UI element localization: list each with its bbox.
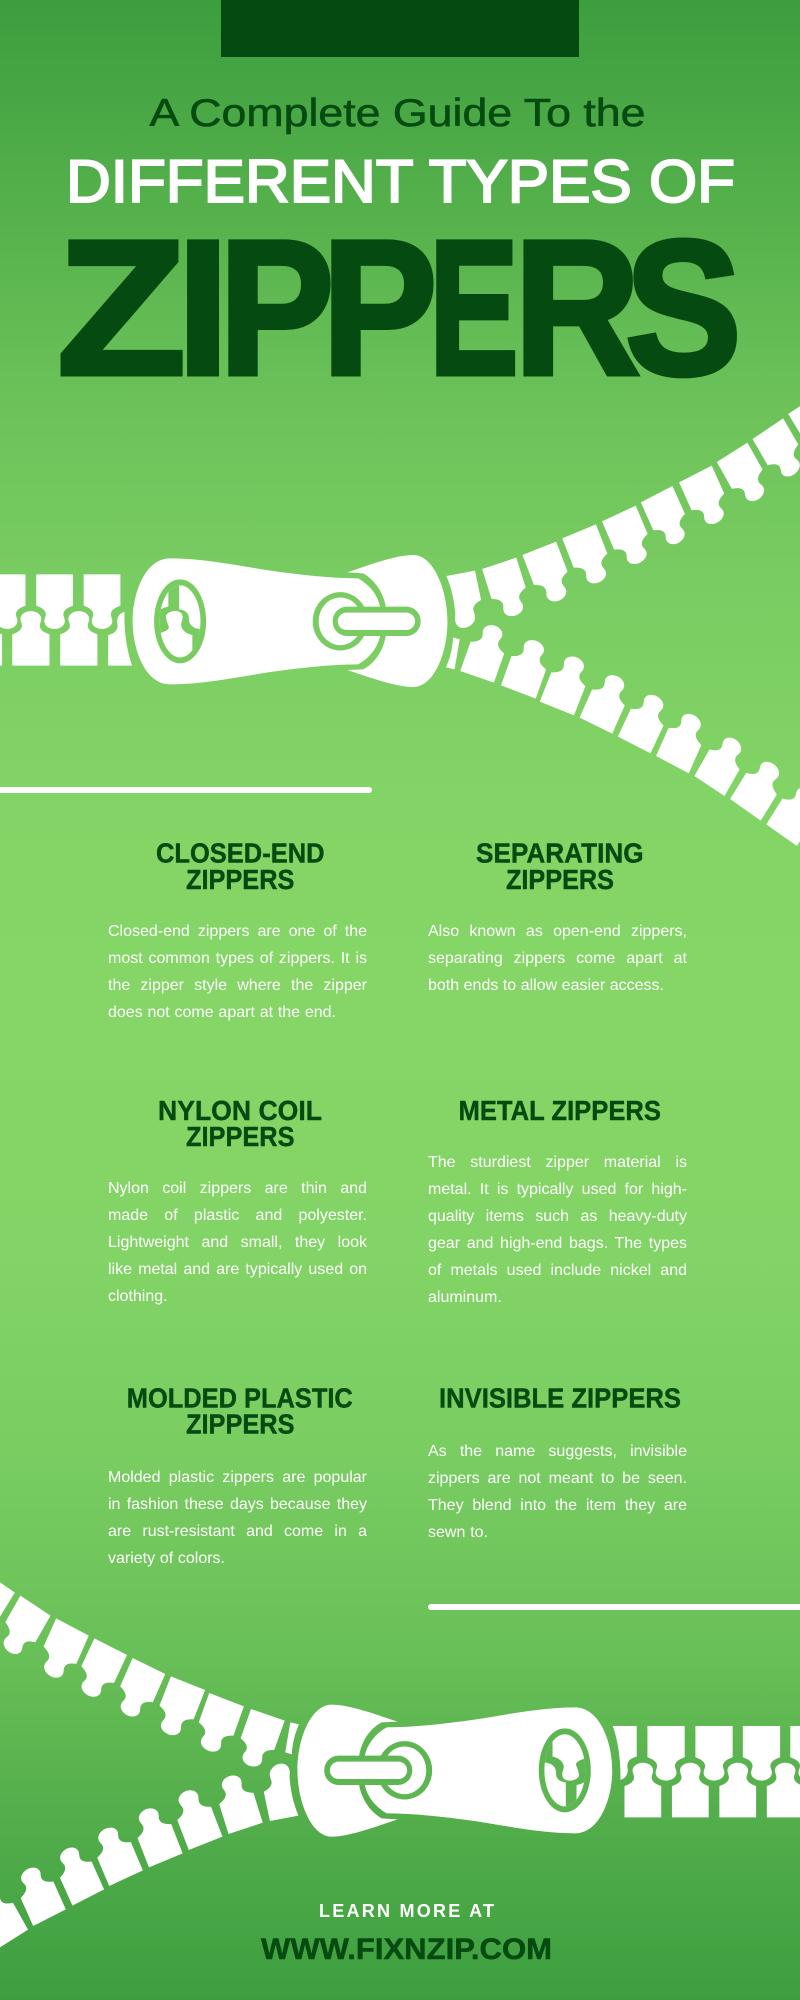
text: nylon coil description: made of plastic and polyester. — [108, 1207, 367, 1224]
panel: closed-end zippers — [108, 838, 367, 1021]
text: metal description: aluminum. — [428, 1289, 502, 1306]
text: closed-end description: does not come apart at the end. — [108, 1004, 336, 1021]
text: metal description: gear and high-end bags. The types — [428, 1235, 687, 1252]
text: nylon coil description: Nylon coil zippers are thin and — [108, 1180, 367, 1197]
text: nylon coil description: Lightweight and small, they look — [108, 1234, 367, 1251]
heading: nylon coil zippers: NYLON COIL — [158, 1095, 322, 1126]
heading: molded plastic zippers: ZIPPERS — [186, 1409, 294, 1440]
text: metal description: The sturdiest zipper material is — [428, 1154, 687, 1171]
upper strand of teeth, bottom zipper — [0, 1546, 299, 1772]
text: invisible description: As the name suggests, invisible — [428, 1443, 687, 1460]
text: invisible description: zippers are not meant to be seen. — [428, 1470, 687, 1487]
heading: closed-end zippers — [156, 838, 324, 895]
text: nylon coil description: clothing. — [108, 1288, 168, 1305]
white divider line right — [428, 1604, 800, 1610]
heading: separating zippers: SEPARATING — [476, 838, 644, 869]
heading: metal zippers: METAL ZIPPERS — [458, 1095, 661, 1126]
heading: molded plastic zippers — [127, 1383, 353, 1440]
text: invisible description — [428, 1443, 687, 1541]
heading: molded plastic zippers: MOLDED PLASTIC — [127, 1383, 353, 1414]
panel: invisible zippers — [428, 1383, 687, 1541]
slider, bottom zipper — [297, 1705, 612, 1837]
panel: metal zippers — [428, 1095, 687, 1306]
text: separating description — [428, 923, 687, 994]
heading: separating zippers: ZIPPERS — [506, 864, 614, 895]
text: invisible description: sewn to. — [428, 1524, 488, 1541]
slider, top zipper — [133, 555, 447, 687]
lower strand of teeth, bottom zipper — [0, 1764, 298, 1998]
text: molded plastic description: Molded plastic zippers are popular — [108, 1469, 367, 1486]
text: metal description: quality items such as heavy-duty — [428, 1208, 687, 1225]
footer: learn more at: LEARN MORE AT — [319, 1901, 494, 1921]
panel: nylon coil zippers — [108, 1095, 367, 1305]
text: metal description: metal. It is typically used for high- — [428, 1181, 687, 1198]
bottom zipper — [0, 1582, 800, 1948]
panel: molded plastic zippers — [108, 1383, 368, 1567]
top zipper — [0, 393, 800, 846]
text: closed-end description — [108, 923, 367, 1021]
title: Different Types Of: DIFFERENT TYPES OF — [66, 148, 735, 215]
text: metal description: of metals used include nickel and — [428, 1262, 687, 1279]
panel: separating zippers — [428, 838, 687, 994]
closed teeth, bottom zipper — [613, 1726, 800, 1817]
closed teeth, top zipper — [0, 574, 132, 666]
heading: closed-end zippers: CLOSED-END — [156, 838, 324, 869]
text: nylon coil description: like metal and are typically used on — [108, 1261, 367, 1278]
text: molded plastic description: are rust-resistant and come in a — [108, 1523, 367, 1540]
lower strand of teeth, top zipper — [446, 620, 800, 846]
title: A Complete Guide To the: A Complete Guide To the — [150, 92, 646, 135]
heading: separating zippers — [476, 838, 644, 895]
text: molded plastic description: in fashion these days because they — [108, 1496, 367, 1513]
text: closed-end description: the zipper style where the zipper — [108, 977, 367, 994]
upper strand of teeth, top zipper — [446, 393, 800, 628]
white divider line left — [0, 787, 372, 792]
text: separating description: Also known as open-end zippers, — [428, 923, 687, 940]
text: metal description — [428, 1154, 687, 1306]
text: closed-end description: most common types of zippers. It is — [108, 950, 367, 967]
heading: nylon coil zippers — [158, 1095, 322, 1152]
text: separating description: both ends to allow easier access. — [428, 977, 664, 994]
text: molded plastic description — [108, 1469, 368, 1567]
text: nylon coil description — [108, 1180, 367, 1305]
heading: invisible zippers: INVISIBLE ZIPPERS — [439, 1383, 681, 1414]
text: invisible description: They blend into the item they are — [428, 1497, 687, 1514]
heading: nylon coil zippers: ZIPPERS — [186, 1121, 294, 1152]
footer: website url: WWW.FIXNZIP.COM — [261, 1933, 552, 1966]
text: molded plastic description: variety of colors. — [108, 1550, 225, 1567]
text: separating description: separating zippers come apart at — [428, 950, 687, 967]
dark top banner — [221, 0, 579, 57]
title: Zippers — [57, 200, 741, 400]
heading: closed-end zippers: ZIPPERS — [186, 864, 294, 895]
text: closed-end description: Closed-end zippers are one of the — [108, 923, 367, 940]
